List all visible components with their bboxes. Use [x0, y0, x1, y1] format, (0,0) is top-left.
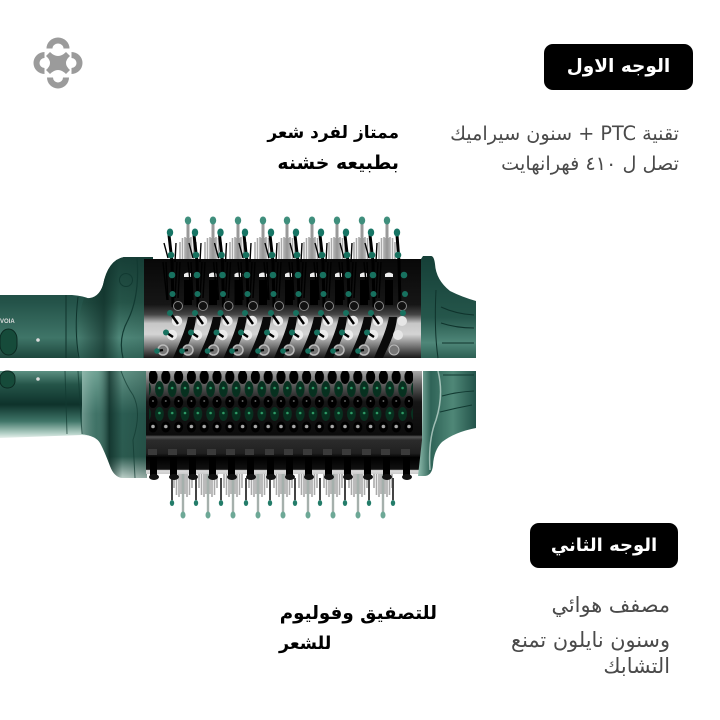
brush side one: end cap [421, 256, 476, 358]
brush side two: handle [0, 371, 112, 438]
brush side one: handle [0, 257, 153, 358]
brush side one: collar [0, 257, 153, 358]
text: side two benefit line 1: للتصفيق وفوليوم [280, 603, 437, 624]
text: side one features line 2: تصل ل ٤١٠ فهرانهايت [501, 152, 679, 175]
text: side two feature 2 line 2: التشابك [603, 654, 670, 678]
text: side one features line 1: تقنية PTC + سنون سيراميك [450, 122, 679, 145]
badge: side two [530, 523, 678, 568]
text: side one benefit line 2: بطبيعه خشنه [277, 152, 399, 174]
text: side two feature 1: مصفف هوائي [552, 593, 670, 617]
badge: side one: الوجه الاول [567, 56, 670, 77]
badge: side one [544, 44, 693, 90]
brush side one: bristles and slots on barrel [154, 228, 408, 358]
brush side two: pillars [148, 449, 412, 480]
icon: brand logo [34, 38, 82, 89]
brush side one: collar: VOIA [0, 319, 15, 325]
brush side two: barrel [146, 371, 422, 474]
brush side two: hairs [170, 474, 395, 518]
badge: side two: الوجه الثاني [551, 535, 657, 556]
brush side two: collar [0, 371, 147, 478]
brush side two: bristle rows [149, 371, 413, 435]
text: side one benefit line 1: ممتاز لفرد شعر [267, 123, 399, 143]
text: side two benefit line 2: للشعر [279, 634, 331, 654]
text: side two feature 2 line 1: وسنون نايلون تمنع [511, 628, 670, 652]
brush side one: barrel [144, 259, 422, 358]
brush side one: bristles behind barrel [180, 216, 395, 259]
brush side two: end cap [418, 371, 476, 476]
